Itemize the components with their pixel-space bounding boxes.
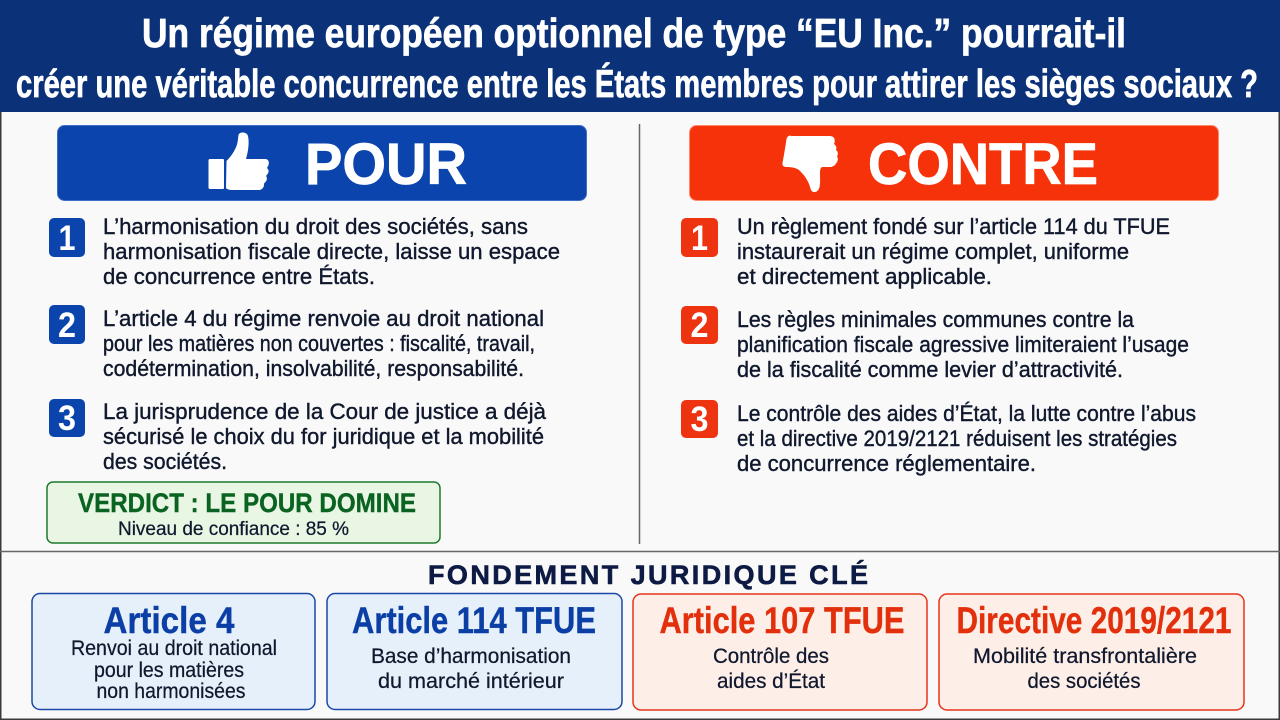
contre item 1: et directement applicable.: [737, 264, 992, 289]
contre item 2: Les règles minimales communes contre la: [737, 307, 1134, 332]
card: directive 2019/2121: [939, 594, 1244, 710]
pour item 1: harmonisation fiscale directe, laisse un espace: [103, 239, 560, 264]
contre header: [690, 126, 1218, 200]
pour item 3: des sociétés.: [103, 449, 227, 474]
card: article 107: Article 107 TFUE: [660, 600, 904, 641]
contre item 2: de la fiscalité comme levier d’attractivité.: [737, 357, 1123, 382]
pour item 1: [49, 214, 560, 289]
card: article 4: Renvoi au droit national: [71, 636, 277, 660]
section heading: fondement juridique: FONDEMENT JURIDIQUE CLÉ: [428, 559, 868, 590]
pour item 3: sécurisé le choix du for juridique et la mobilité: [103, 424, 544, 449]
pour item 3: 3: [58, 399, 76, 438]
card: article 4: non harmonisées: [96, 679, 246, 703]
card: article 114: Base d’harmonisation: [371, 644, 571, 668]
pour item 2: L’article 4 du régime renvoie au droit national: [103, 306, 544, 331]
pour header: POUR: [305, 132, 467, 197]
contre item 3: [681, 400, 1196, 476]
contre item 1: 1: [691, 219, 708, 258]
contre item 1: [681, 214, 1170, 289]
contre item 3: Le contrôle des aides d’État, la lutte contre l’abus: [737, 401, 1196, 426]
contre item 1: Un règlement fondé sur l’article 114 du TFUE: [737, 214, 1170, 239]
card: article 114: du marché intérieur: [378, 669, 564, 693]
title banner: Un régime européen optionnel de type “EU Inc.” pourrait-il: [142, 10, 1126, 56]
verdict box: VERDICT : LE POUR DOMINE: [78, 488, 416, 518]
verdict box: [47, 482, 440, 543]
pour item 1: 1: [58, 219, 76, 258]
contre item 1: instaurerait un régime complet, uniforme: [737, 239, 1129, 264]
pour item 2: [49, 305, 544, 381]
pour item 3: [49, 399, 546, 474]
icon: thumbs down: [782, 136, 838, 192]
contre header: CONTRE: [868, 132, 1098, 197]
contre item 3: de concurrence réglementaire.: [737, 451, 1036, 476]
pour item 1: L’harmonisation du droit des sociétés, sans: [103, 214, 528, 239]
card: article 107: [633, 594, 927, 710]
contre item 3: 3: [690, 400, 708, 439]
card: article 4: pour les matières: [94, 658, 244, 682]
verdict box: Niveau de confiance : 85 %: [118, 518, 349, 540]
card: directive 2019/2121: Mobilité transfrontalière: [973, 644, 1197, 668]
card: article 107: aides d’État: [717, 668, 825, 693]
card: article 114: [327, 594, 622, 710]
contre item 2: [681, 306, 1189, 382]
title banner: [0, 0, 1280, 112]
card: article 4: [32, 594, 315, 710]
contre item 2: planification fiscale agressive limiteraient l’usage: [737, 332, 1189, 357]
card: article 114: Article 114 TFUE: [352, 600, 596, 641]
card: article 107: Contrôle des: [713, 644, 829, 668]
pour item 1: de concurrence entre États.: [103, 264, 375, 289]
card: directive 2019/2121: des sociétés: [1028, 669, 1140, 693]
pour header: [58, 126, 586, 200]
contre item 2: 2: [690, 306, 708, 345]
panel: contre: [681, 126, 1218, 476]
pour item 2: 2: [58, 306, 76, 345]
icon: thumbs up: [208, 132, 269, 190]
card: article 4: Article 4: [104, 600, 235, 641]
pour item 2: codétermination, insolvabilité, responsabilité.: [103, 356, 524, 381]
contre item 3: et la directive 2019/2121 réduisent les stratégies: [737, 426, 1177, 451]
pour item 2: pour les matières non couvertes : fiscalité, travail,: [103, 331, 535, 356]
pour item 3: La jurisprudence de la Cour de justice a déjà: [103, 399, 546, 424]
panel: pour: [49, 126, 586, 474]
